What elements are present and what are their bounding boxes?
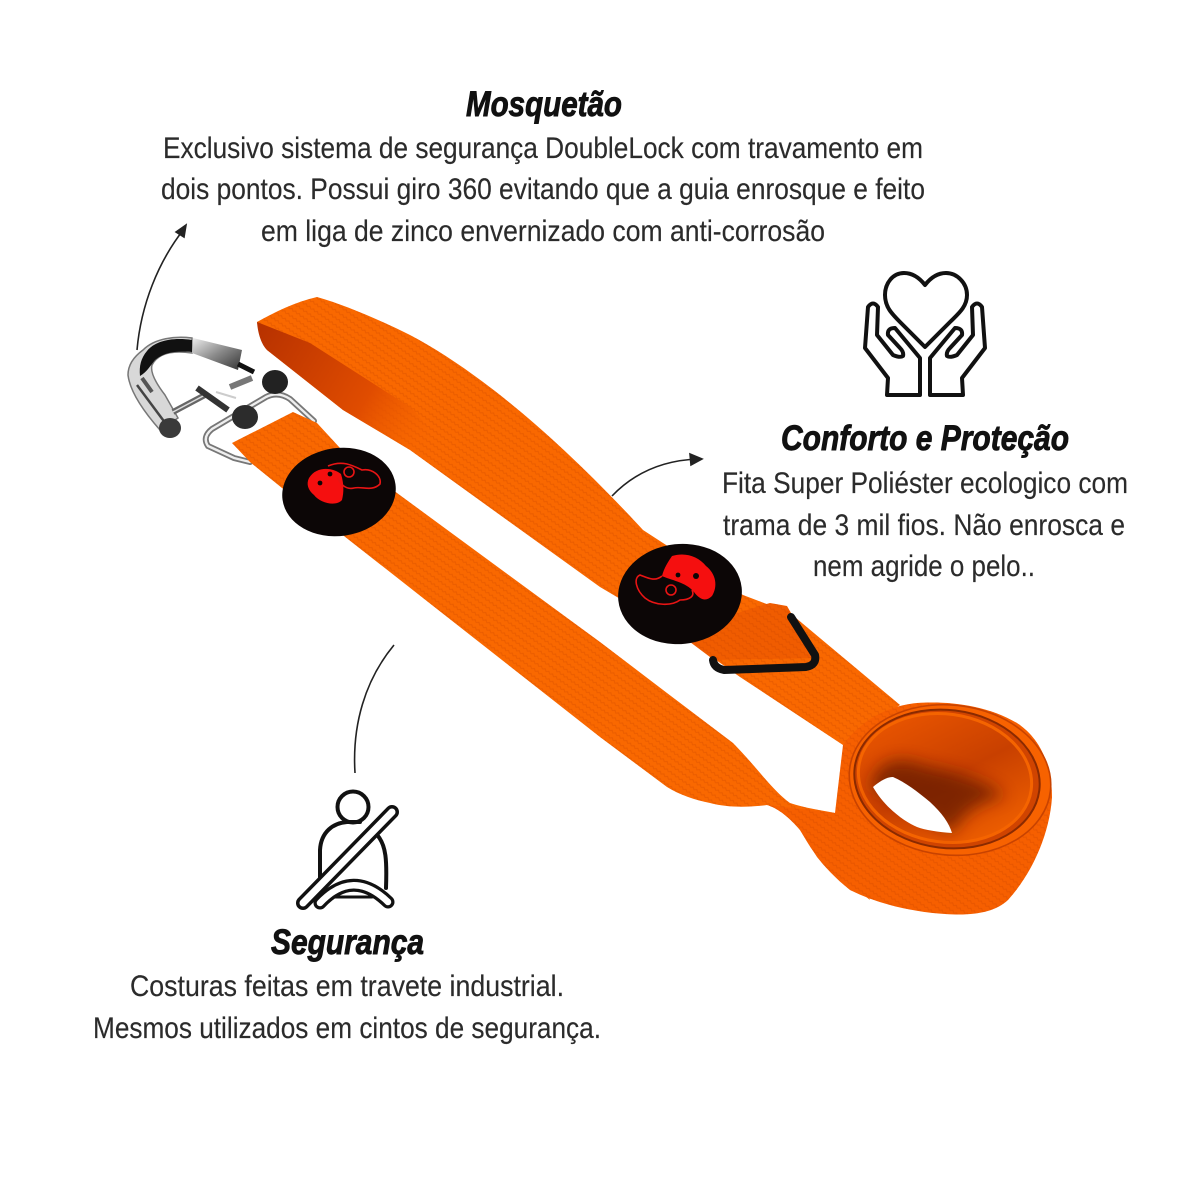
carabiner: dark top [140, 339, 192, 376]
text block: Conforto e Proteção description: Fita Super Poliéster ecologico com [722, 467, 1128, 500]
hardware: buckle rectangle [206, 394, 314, 462]
heading: Conforto e Proteção: Conforto e Proteção [781, 419, 1069, 458]
logo disc: right [613, 538, 747, 650]
carabiner: sleeve [192, 338, 242, 370]
strap: lower band [232, 412, 870, 900]
icon: seat belt [303, 792, 392, 903]
strap: fold near triangle ring [678, 603, 817, 660]
text block: Segurança description [93, 970, 601, 1045]
hardware: carabiner [128, 337, 288, 438]
text block: Segurança description: Mesmos utilizados em cintos de segurança. [93, 1012, 601, 1045]
arrow: seam pointer line [355, 645, 394, 773]
icon: hands holding heart [865, 273, 985, 395]
product: orange leash with carabiner [128, 297, 1058, 914]
text block: Mosquetão description: em liga de zinco envernizado com anti-corrosão [261, 215, 825, 248]
carabiner: D body [128, 337, 192, 430]
hardware: triangle ring [713, 617, 815, 670]
logo disc: left [276, 440, 402, 544]
strap: handle loop inside [850, 703, 1040, 853]
heading: Mosquetão: Mosquetão [466, 85, 622, 124]
text block: Mosquetão description: dois pontos. Possui giro 360 evitando que a guia enrosque e feito [161, 173, 925, 206]
text block: Conforto e Proteção description: trama de 3 mil fios. Não enrosca e [723, 509, 1125, 542]
heading: Segurança: Segurança [271, 923, 424, 962]
text block: Segurança description: Costuras feitas em travete industrial. [130, 970, 564, 1003]
strap: handle loop interior shadow [872, 760, 1005, 833]
arrow: to strap [612, 454, 702, 496]
strap: upper band [257, 297, 900, 745]
carabiner: end caps and bolts [159, 418, 181, 438]
text block: Conforto e Proteção description [722, 467, 1128, 583]
carabiner: shafts [173, 395, 205, 412]
text block: Mosquetão description [161, 132, 925, 248]
text block: Conforto e Proteção description: nem agride o pelo.. [813, 550, 1035, 583]
strap: handle loop outer lip [842, 695, 1058, 865]
text block: Mosquetão description: Exclusivo sistema de segurança DoubleLock com travamento em [163, 132, 923, 165]
strap: handle loop opening [873, 777, 952, 833]
strap: handle loop outer [767, 702, 1052, 914]
strap: upper loop underside [257, 322, 450, 478]
strap: handle loop middle ring [846, 699, 1048, 859]
arrow: to carabiner [137, 225, 186, 350]
